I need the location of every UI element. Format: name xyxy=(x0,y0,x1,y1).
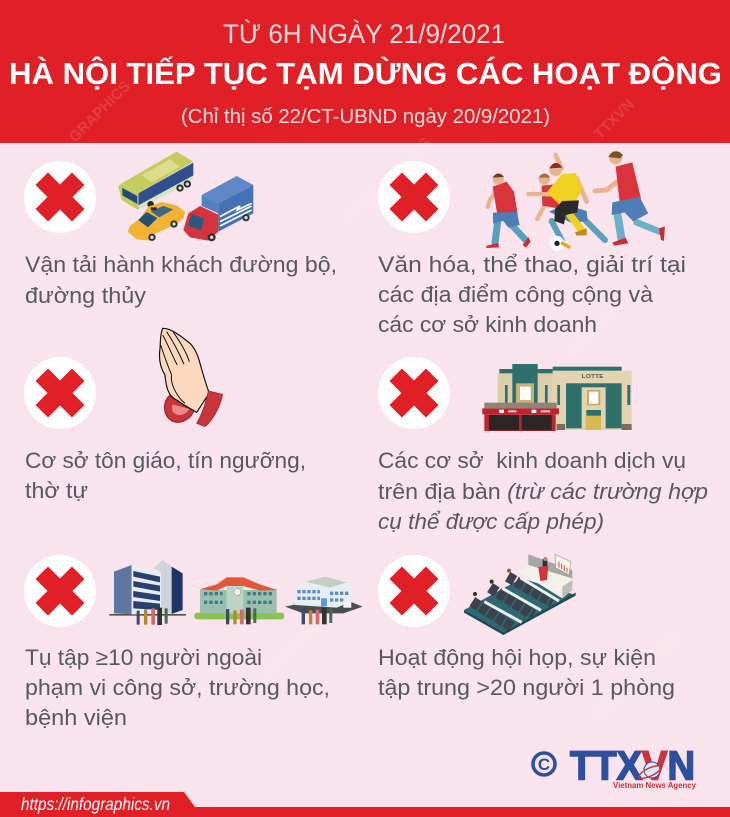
icon: office, school and hospital with crowds xyxy=(109,560,363,625)
footer url: https://infographics.vn xyxy=(21,794,170,814)
panel: meetings and events xyxy=(378,554,675,700)
icon: copyright mark: C xyxy=(538,755,550,774)
text: meetings and events: Hoạt động hội họp, sự kiện xyxy=(378,645,656,670)
text: gatherings: phạm vi công sở, trường học, xyxy=(25,675,330,700)
text: meetings and events xyxy=(378,645,675,700)
text: gatherings: Tụ tập ≥10 người ngoài xyxy=(25,645,262,670)
agency tagline: Vietnam News Agency xyxy=(613,781,697,790)
logo: TTXVN Vietnam News Agency xyxy=(533,742,697,790)
icon: globe xyxy=(637,762,663,781)
panel: culture and sports xyxy=(378,151,686,337)
icon: praying hands xyxy=(159,328,223,427)
text: gatherings xyxy=(25,645,330,730)
icon: bus, taxi and truck xyxy=(118,152,253,241)
label: shop sign: LOTTE xyxy=(582,374,604,380)
panel: business services xyxy=(378,357,708,534)
icon: prohibited cross xyxy=(24,357,96,429)
text: culture and sports: các địa điểm công cộng và xyxy=(378,282,653,307)
panel: gatherings xyxy=(24,555,363,730)
text: culture and sports: Văn hóa, thể thao, giải trí tại xyxy=(378,252,686,277)
watermarks: INFOGRAPHICS xyxy=(261,589,354,683)
panel: passenger transport xyxy=(24,152,337,308)
text: religious venues xyxy=(25,448,306,503)
header kicker: TỪ 6H NGÀY 21/9/2021 xyxy=(223,18,505,49)
watermarks: GRAPHICS xyxy=(561,295,629,363)
icon: conference room xyxy=(464,554,576,635)
watermarks: INFOGRAPHICS xyxy=(341,134,434,228)
icon: football players xyxy=(486,151,665,251)
icon: prohibited cross xyxy=(24,555,96,627)
icon: Lotte shopping centre xyxy=(482,364,632,431)
watermarks xyxy=(66,78,684,723)
panel: religious venues xyxy=(24,328,306,503)
text: culture and sports: các cơ sở kinh doanh xyxy=(378,312,597,337)
text: culture and sports xyxy=(378,252,686,337)
text: meetings and events: tập trung >20 người 1 phòng xyxy=(378,675,675,700)
text: passenger transport xyxy=(25,252,337,308)
main title: HÀ NỘI TIẾP TỤC TẠM DỪNG CÁC HOẠT ĐỘNG xyxy=(9,55,722,91)
icon: prohibited cross xyxy=(378,555,450,627)
text: business services: trên địa bàn (trừ các trường hợp xyxy=(378,479,708,504)
header band xyxy=(0,0,730,143)
watermarks: INFOGRAPHICS xyxy=(591,629,684,723)
text: gatherings: bệnh viện xyxy=(25,705,127,730)
icon: prohibited cross xyxy=(378,161,450,233)
icon: copyright mark xyxy=(533,753,555,775)
watermarks: GRAPHICS xyxy=(66,78,134,146)
icon: prohibited cross xyxy=(24,161,96,233)
text: business services: cụ thể được cấp phép) xyxy=(378,509,604,534)
text: business services xyxy=(378,448,708,534)
text: passenger transport: đường thủy xyxy=(25,283,147,308)
text: religious venues: Cơ sở tôn giáo, tín ngưỡng, xyxy=(25,448,306,473)
text: business services: Các cơ sở kinh doanh dịch vụ xyxy=(378,448,686,473)
footer bar xyxy=(0,792,730,817)
subtitle: (Chỉ thị số 22/CT-UBND ngày 20/9/2021) xyxy=(181,105,550,128)
text: religious venues: thờ tự xyxy=(25,478,88,503)
text: passenger transport: Vận tải hành khách đường bộ, xyxy=(25,252,337,277)
wordmark: TTXVN xyxy=(570,742,695,788)
watermarks: TTXVN xyxy=(591,96,638,143)
icon: prohibited cross xyxy=(378,357,450,429)
